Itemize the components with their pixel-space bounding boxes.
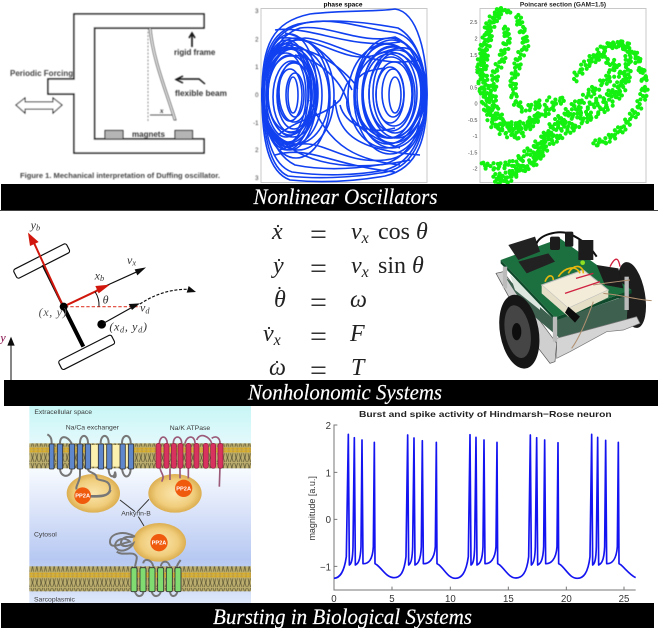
equation: x dot xyxy=(271,218,428,251)
chart title: Burst and spike activity of Hindmarsh−Rose neuron xyxy=(359,409,612,419)
label: periodic forcing: Periodic Forcing xyxy=(10,69,73,78)
Poincare tick labels: 1 xyxy=(474,69,478,75)
math labels: b xyxy=(36,224,40,233)
y body arrow xyxy=(28,233,63,307)
Poincare tick labels xyxy=(468,20,478,172)
band: Bursting in Biological Systems: Bursting in Biological Systems xyxy=(213,604,472,629)
photo: robot xyxy=(494,232,652,372)
equation: x dot: cos θ xyxy=(378,219,428,245)
y tick labels: −1 xyxy=(320,562,331,573)
equation: theta dot: ω xyxy=(350,287,367,313)
label: rigid frame: rigid frame xyxy=(174,48,216,57)
x body arrow xyxy=(63,285,110,307)
math labels: y xyxy=(31,218,36,232)
lower wheel xyxy=(58,334,115,370)
arrow: flexible beam xyxy=(176,76,205,84)
phase space title: phase space xyxy=(323,2,363,8)
equation: x dot: v xyxy=(351,219,362,245)
lower membrane xyxy=(29,566,251,591)
Poincare tick labels: 2.5 xyxy=(470,20,478,26)
green LED xyxy=(580,260,585,265)
blue helices xyxy=(49,444,134,469)
x tick labels: 0 xyxy=(331,594,337,605)
region and protein labels: Extracellular space xyxy=(34,409,92,416)
region and protein labels: Sarcoplasmic xyxy=(34,596,76,603)
middle section xyxy=(505,277,628,338)
dashed heading line xyxy=(65,305,140,308)
Poincare tick labels: 2 xyxy=(474,36,478,42)
math labels: x xyxy=(95,268,100,282)
phase space tick labels: -1 xyxy=(253,121,259,127)
diagram: unicycle kinematics xyxy=(0,218,196,380)
rest position dashed line xyxy=(147,28,149,121)
displacement x marker xyxy=(150,107,172,115)
PP2A labels: PP2A xyxy=(75,494,90,500)
y tick labels xyxy=(320,421,331,573)
red wires xyxy=(565,259,620,293)
math labels: θ xyxy=(103,293,109,307)
equation: y dot: x xyxy=(361,264,369,281)
equation: v dot xyxy=(263,320,365,353)
Poincare tick labels: 1.5 xyxy=(470,53,478,59)
equations xyxy=(263,218,428,387)
burst trace xyxy=(334,434,636,578)
equation: v dot: x xyxy=(273,332,281,349)
Poincare tick labels: 0 xyxy=(474,102,478,108)
PP2A labels: PP2A xyxy=(152,541,166,547)
yellow wires xyxy=(545,266,583,282)
equation: omega dot: ω xyxy=(269,355,286,381)
figure caption: Figure 1. Mechanical interpretation of Duffing oscillator. xyxy=(20,171,220,180)
region and protein labels: Ankyrin-B xyxy=(121,510,151,517)
pale window xyxy=(510,275,540,310)
components xyxy=(550,232,623,288)
pink connectors xyxy=(159,436,220,487)
phase space tick labels: 3 xyxy=(255,9,259,15)
phase space tick labels: 0 xyxy=(255,93,259,99)
breadboard xyxy=(542,270,608,308)
Poincare axes xyxy=(480,8,646,182)
Poincare tick labels: -1.5 xyxy=(468,150,478,156)
Na/Ca exchanger connectors xyxy=(47,434,131,496)
band: Nonholonomic Systems xyxy=(4,380,658,406)
math labels: b xyxy=(100,274,104,283)
x tick labels: 25 xyxy=(619,594,629,605)
math labels: ) xyxy=(142,320,148,334)
band: Nonholonomic Systems: Nonholonomic Systems xyxy=(247,380,442,404)
wheel hub xyxy=(501,303,535,360)
equation: v dot: = xyxy=(310,320,327,353)
vd arrow xyxy=(103,303,140,323)
magnets xyxy=(105,130,192,139)
tangled N-terminus xyxy=(110,533,181,596)
vx arrow xyxy=(97,267,146,290)
band: Nonlinear Oscillators xyxy=(1,184,654,210)
angle arc xyxy=(95,292,99,307)
diagram background xyxy=(29,406,251,603)
x tick labels: 10 xyxy=(445,594,456,605)
region and protein labels: Cytosol xyxy=(34,532,57,539)
rear wheel xyxy=(613,260,651,330)
math labels: (x xyxy=(109,320,120,334)
axle xyxy=(43,265,63,307)
region and protein labels: Na/K ATPase xyxy=(170,425,210,432)
math labels: (x, y) xyxy=(39,305,67,319)
target point xyxy=(97,320,106,329)
x tick labels: 5 xyxy=(389,594,395,605)
math labels: , y xyxy=(125,320,138,334)
equation: omega dot xyxy=(269,354,366,387)
dashed path xyxy=(140,286,196,304)
divider line xyxy=(0,210,658,212)
label: magnets: magnets xyxy=(132,130,165,139)
phase space tick labels: 2 xyxy=(255,38,259,44)
label: flexible beam: flexible beam xyxy=(175,89,227,98)
gold ellipses xyxy=(67,474,202,562)
equation: x dot: x xyxy=(361,230,369,247)
math labels xyxy=(0,218,150,345)
x tick labels: 15 xyxy=(503,594,514,605)
displacement x marker: x xyxy=(159,107,164,115)
equation: y dot: = xyxy=(310,252,327,285)
wheel axle xyxy=(512,323,521,340)
equation: y dot: v xyxy=(351,253,362,279)
phase trajectory xyxy=(262,9,427,182)
phase space tick labels: 2 xyxy=(255,148,259,154)
region and protein labels: Na/Ca exchanger xyxy=(66,425,120,432)
black sensor xyxy=(565,307,580,323)
phase space tick labels: 3 xyxy=(255,176,259,182)
front chassis plate xyxy=(557,317,640,358)
band: Bursting in Biological Systems xyxy=(1,603,654,629)
equation: theta dot xyxy=(274,286,367,319)
world y axis xyxy=(7,337,15,380)
math labels: d xyxy=(138,325,143,334)
y tick labels: 1 xyxy=(326,468,331,479)
Poincare title: Poincaré section (GAM=1.5) xyxy=(520,2,606,8)
math labels: d xyxy=(120,325,125,334)
equation: x dot: = xyxy=(310,218,327,251)
panel: Duffing oscillator diagram xyxy=(10,14,227,180)
board side xyxy=(501,260,632,321)
arrow: rigid frame xyxy=(189,33,195,47)
phase space axes xyxy=(261,8,427,182)
flexible beam xyxy=(149,28,176,120)
phase space tick labels xyxy=(253,9,259,182)
phase space tick labels: 1 xyxy=(255,65,259,71)
equation: y dot: y xyxy=(271,253,284,279)
y tick labels: 2 xyxy=(326,421,331,432)
PP2A labels: PP2A xyxy=(176,486,191,492)
serial connector xyxy=(508,237,540,260)
equation: v dot: v xyxy=(263,321,274,347)
equation: theta dot: = xyxy=(310,286,327,319)
band: Nonlinear Oscillators: Nonlinear Oscillators xyxy=(253,184,438,209)
front wheel xyxy=(494,292,545,372)
upper wheel xyxy=(13,243,70,279)
chart: Poincare section xyxy=(468,2,648,185)
math labels: v xyxy=(127,253,132,267)
double arrow xyxy=(16,98,62,113)
y tick labels: 0 xyxy=(326,515,331,526)
lower axle xyxy=(63,307,83,347)
PP2A circles xyxy=(74,480,192,551)
Poincare tick labels: 0.5 xyxy=(470,86,478,92)
cable xyxy=(537,232,597,257)
equation: v dot: F xyxy=(349,321,365,347)
math labels: d xyxy=(145,306,150,315)
equation: omega dot: = xyxy=(310,354,327,387)
top board xyxy=(501,238,632,317)
green helices xyxy=(131,568,181,592)
chart: Hindmarsh-Rose burst and spike xyxy=(307,409,636,605)
equation: theta dot: θ xyxy=(274,287,286,313)
math labels: v xyxy=(140,301,145,315)
PP2A labels xyxy=(75,486,191,547)
x tick labels xyxy=(331,594,629,605)
Poincare tick labels: -2 xyxy=(473,166,478,172)
equation: y dot xyxy=(271,252,424,285)
region and protein labels xyxy=(34,409,210,603)
math labels: y xyxy=(0,331,6,345)
x tick labels: 20 xyxy=(561,594,572,605)
upper membrane xyxy=(29,443,251,468)
diagram: ion channels and ankyrin xyxy=(29,406,251,603)
y axis label: magnitude [a.u.] xyxy=(307,476,317,541)
equation: omega dot: T xyxy=(351,355,366,381)
ankyrin lines xyxy=(120,499,149,526)
pink helices xyxy=(156,443,223,468)
Poincare points xyxy=(477,7,648,185)
Poincare tick labels: -1 xyxy=(473,134,478,140)
left rail xyxy=(496,272,557,363)
PP2A connector xyxy=(91,490,111,497)
equation: x dot: x xyxy=(271,219,283,245)
breadboard front xyxy=(542,285,608,317)
math labels: x xyxy=(131,259,136,268)
rigid frame xyxy=(48,14,204,153)
exchanger gap xyxy=(88,445,128,467)
whisker wires xyxy=(572,280,652,348)
chart: phase space xyxy=(253,2,427,182)
body centre xyxy=(60,303,68,311)
spacer posts xyxy=(505,267,627,342)
Poincare tick labels: -0.5 xyxy=(468,118,478,124)
equation: y dot: sin θ xyxy=(378,253,424,279)
axes xyxy=(334,425,636,590)
microcontroller xyxy=(518,253,555,273)
